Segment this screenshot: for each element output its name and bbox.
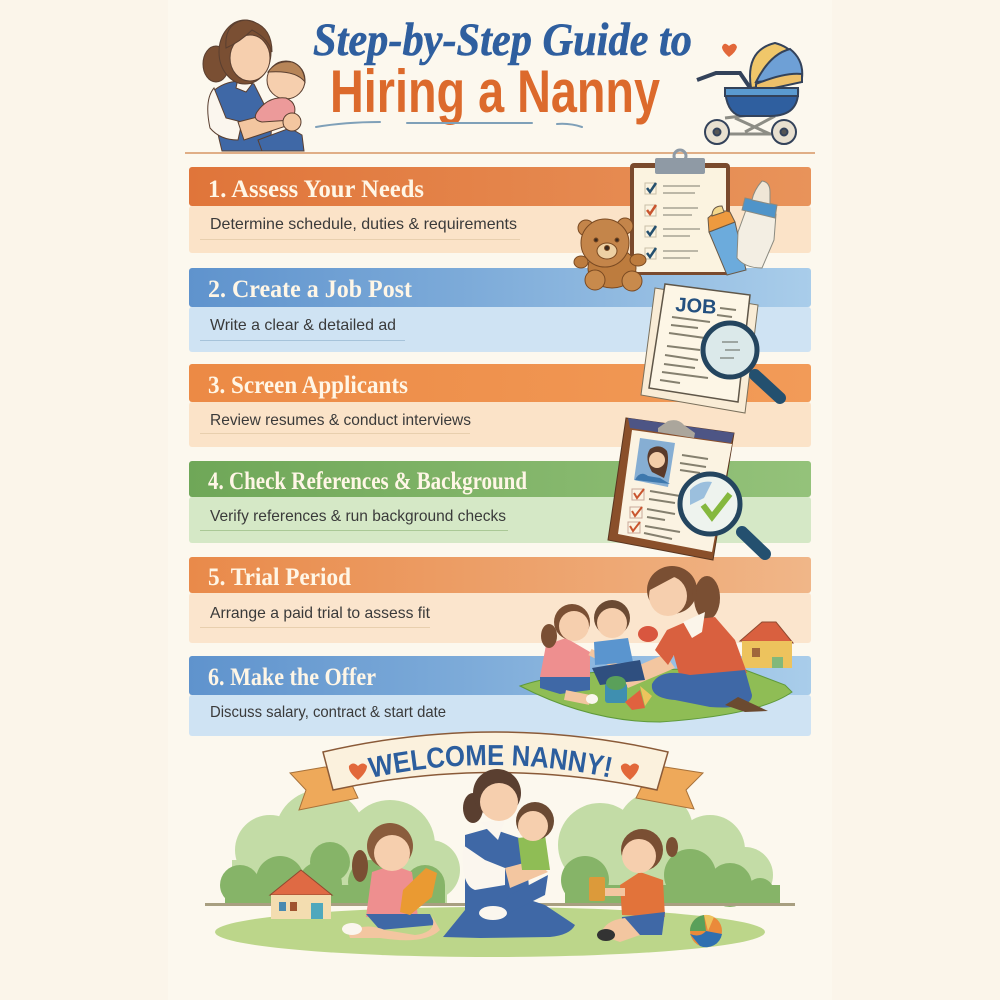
- title: [313, 14, 692, 125]
- step 6 panel: Discuss salary, contract & start date: [210, 704, 446, 721]
- grass mat: [520, 668, 792, 722]
- step 5 panel: 5. Trial Period: [208, 564, 351, 591]
- stroller: [697, 43, 802, 144]
- title: Step-by-Step Guide to: [313, 14, 692, 66]
- step 3 panel: 3. Screen Applicants: [208, 372, 408, 399]
- scene: nanny playing with children on grass: [520, 566, 793, 722]
- icon: job papers: JOB: [675, 294, 717, 319]
- step 1 panel: 1. Assess Your Needs: [208, 176, 424, 203]
- title underline: [316, 122, 582, 127]
- title: Hiring a Nanny: [330, 58, 660, 125]
- icon: teddy bear: [574, 218, 646, 291]
- step 4 panel: [189, 461, 811, 543]
- icon: magnifying glass with check: [680, 474, 765, 554]
- header divider: [185, 152, 815, 154]
- step 2 panel: Write a clear & detailed ad: [210, 317, 396, 334]
- step 1 panel: Determine schedule, duties & requirements: [210, 216, 517, 233]
- header icon: nanny holding baby: [203, 20, 305, 151]
- icon: clipboard with checklist: [630, 150, 730, 275]
- step 2 panel: [189, 268, 811, 352]
- scene trees: [220, 790, 780, 907]
- icon: baby bottle: [737, 181, 777, 268]
- toy house left: [270, 870, 332, 919]
- toy house: [740, 622, 793, 668]
- icon: job papers: [641, 284, 758, 413]
- ball: [690, 915, 722, 947]
- step 4 panel: Verify references & run background checks: [210, 508, 506, 525]
- icon: sippy bottle: [708, 206, 746, 275]
- boy: [592, 600, 658, 685]
- boy with toy cup: [589, 829, 678, 942]
- girl with toy: [342, 823, 440, 940]
- icon: background check clipboard: [608, 418, 734, 560]
- toys: [605, 676, 652, 710]
- banner: WELCOME NANNY!: [367, 745, 612, 778]
- icon: magnifying glass on job post: [703, 323, 780, 398]
- nanny and toddler: [443, 769, 575, 938]
- step 6 panel: [189, 656, 811, 736]
- step 1 panel: [189, 167, 811, 253]
- step 5 panel: [189, 557, 811, 643]
- girl: [540, 604, 616, 704]
- step 3 panel: [189, 364, 811, 447]
- step 5 panel: Arrange a paid trial to assess fit: [210, 605, 431, 622]
- nanny: [619, 566, 768, 712]
- heart: [722, 44, 737, 57]
- banner: [289, 731, 704, 811]
- step 2 panel: 2. Create a Job Post: [208, 276, 413, 303]
- step 6 panel: 6. Make the Offer: [208, 664, 376, 691]
- grass: [205, 903, 795, 957]
- step 3 panel: Review resumes & conduct interviews: [210, 412, 471, 429]
- step 4 panel: 4. Check References & Background: [208, 468, 527, 495]
- paper panel: [168, 0, 832, 1000]
